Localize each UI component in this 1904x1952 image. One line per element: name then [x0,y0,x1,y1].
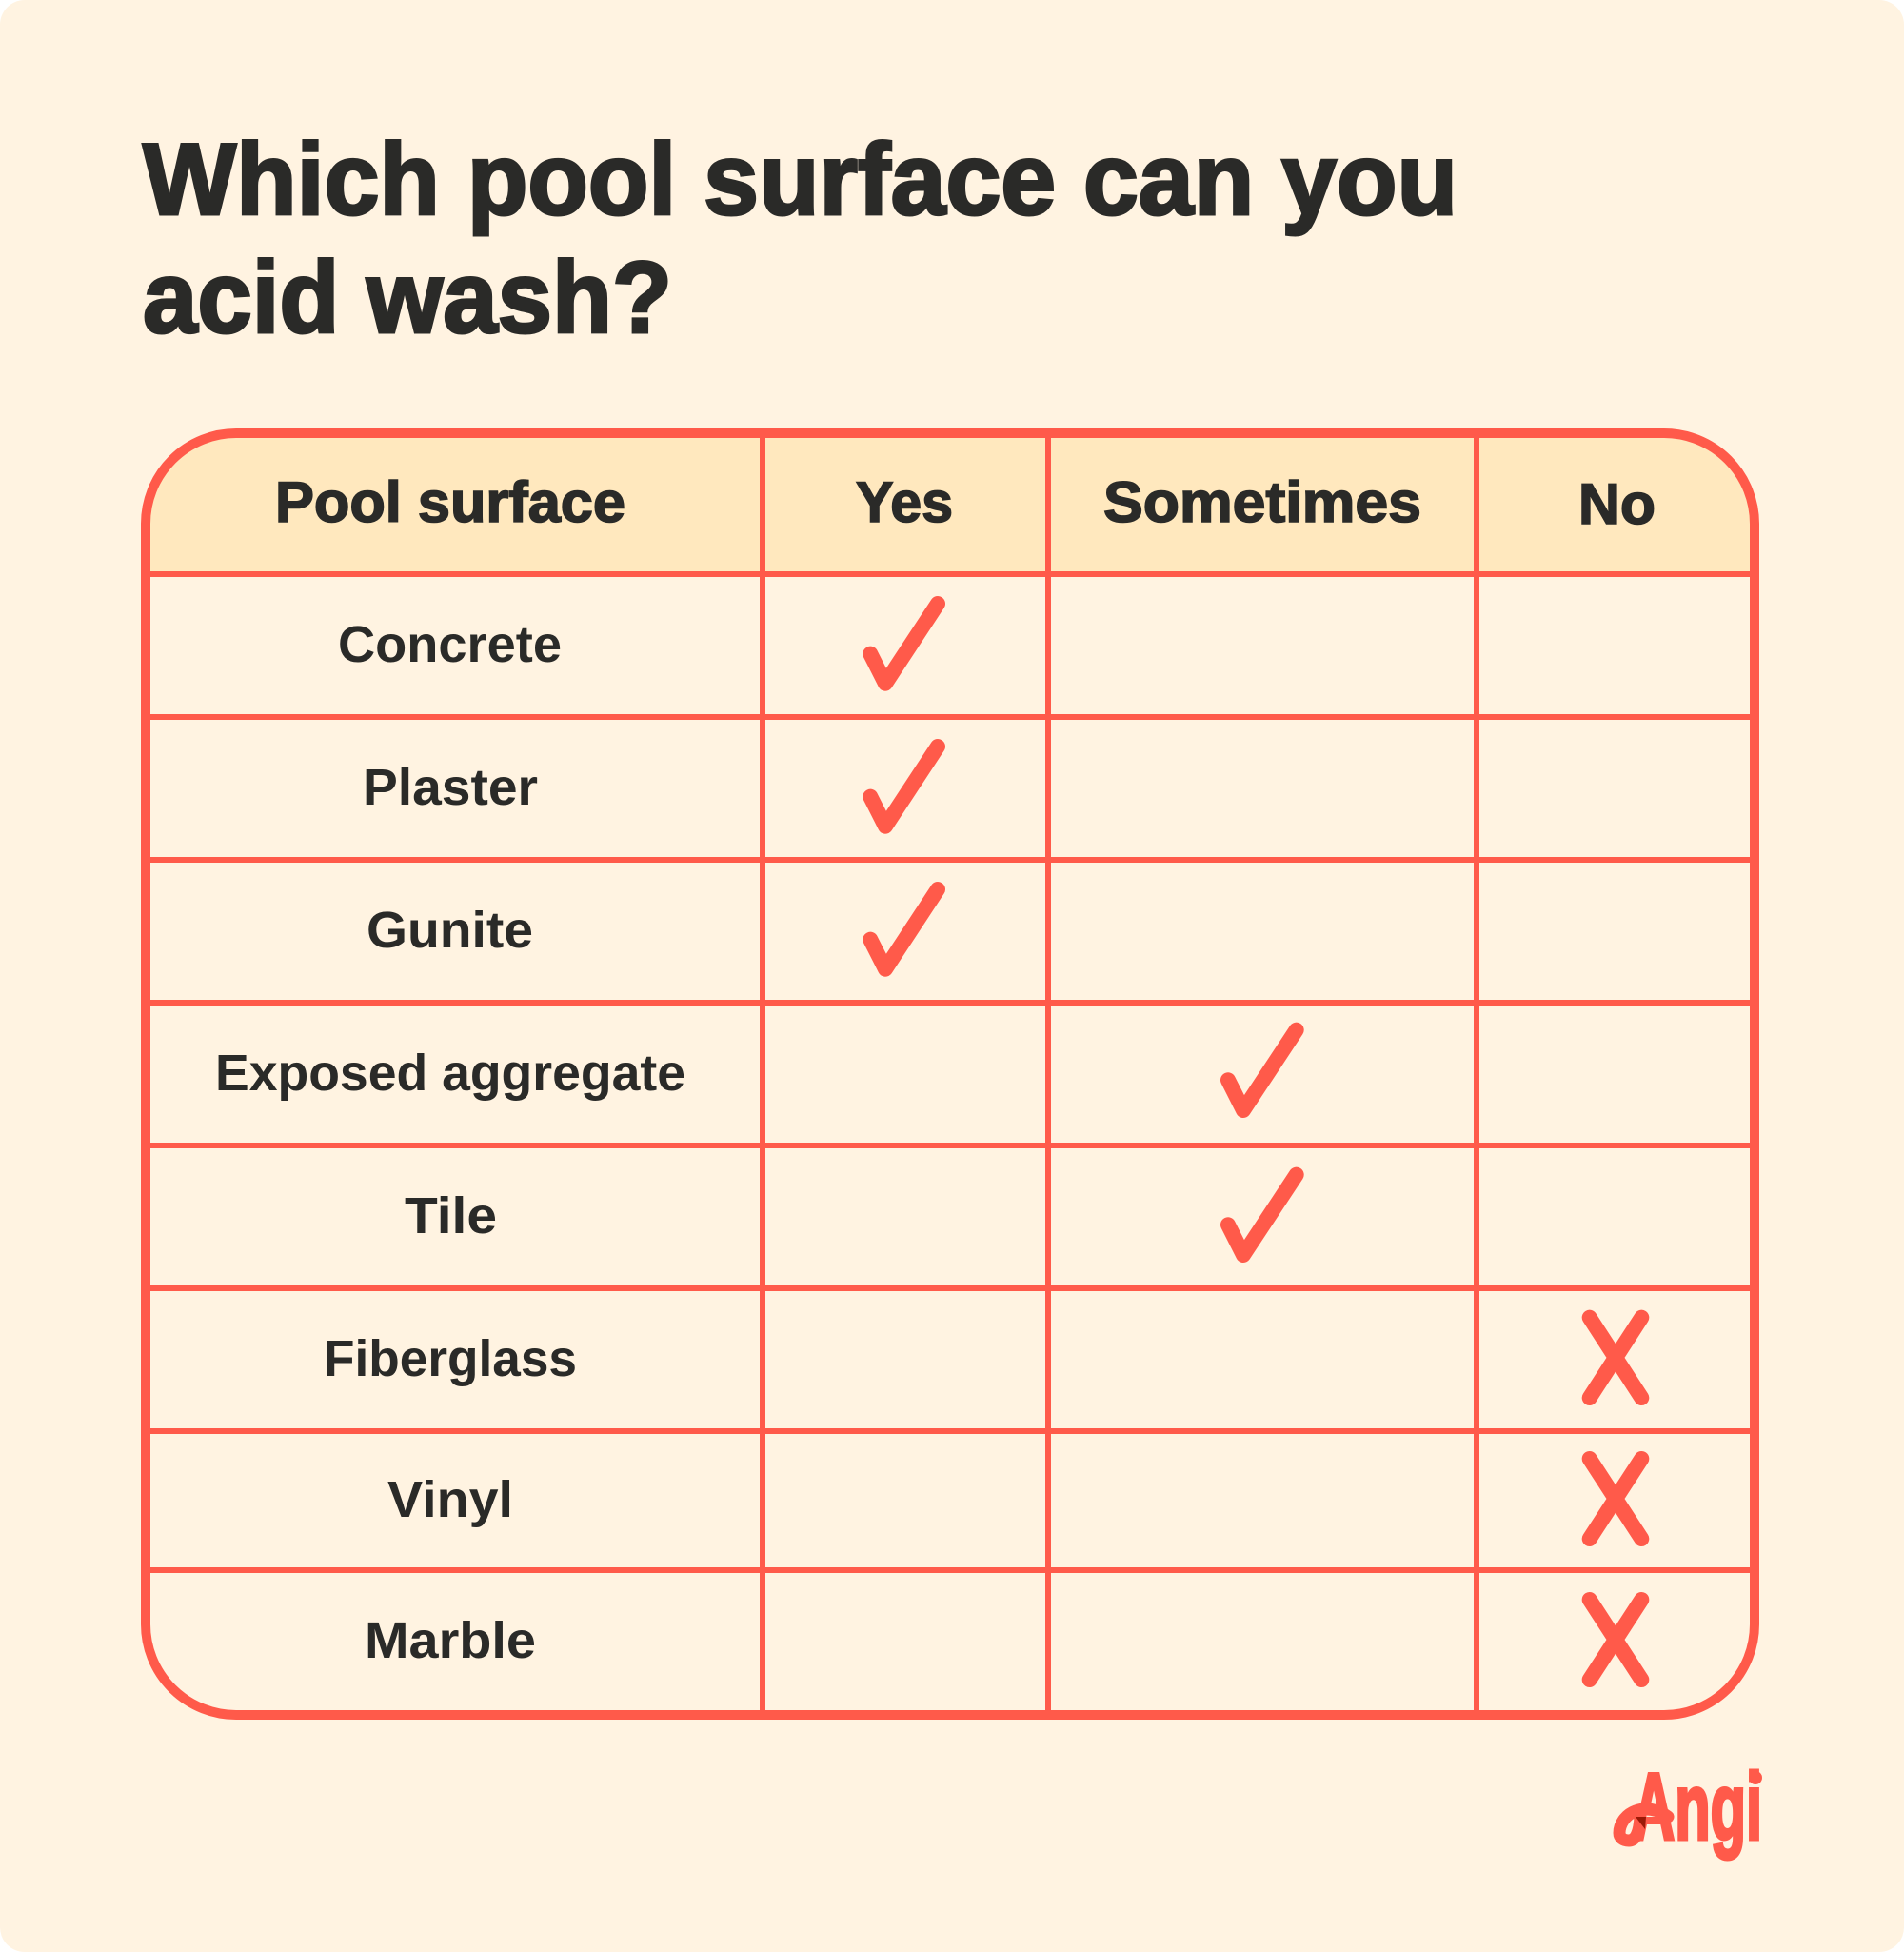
title: acid wash? [143,240,672,354]
row label: Exposed aggregate: Exposed aggregate [215,1045,685,1102]
Angi logo [1619,1754,1762,1859]
row label: Concrete: Concrete [338,616,562,673]
column heading: No: No [1578,472,1656,536]
row label: Plaster: Plaster [363,759,538,816]
icon: cross, Vinyl / No [1590,1459,1641,1539]
table header background [146,433,1755,574]
icon: check, Concrete / Yes [870,604,938,684]
icon: check, Exposed aggregate / Sometimes [1228,1030,1297,1110]
icon: check, Tile / Sometimes [1228,1175,1297,1255]
icon: cross, Marble / No [1590,1600,1641,1680]
column heading: Sometimes: Sometimes [1103,470,1421,534]
column heading: Yes: Yes [856,470,953,534]
Angi logo: Angi [1633,1754,1762,1859]
row label: Fiberglass: Fiberglass [324,1330,577,1387]
table [146,433,1755,1715]
row label: Tile: Tile [405,1187,497,1245]
table grid lines [146,433,1755,1715]
row label: Vinyl: Vinyl [387,1471,513,1528]
column heading: Pool surface: Pool surface [275,470,625,534]
table outer frame [146,433,1755,1715]
title [143,122,1458,354]
row label: Gunite: Gunite [367,902,533,959]
icon: check, Gunite / Yes [870,889,938,969]
icon: cross, Fiberglass / No [1590,1318,1641,1398]
icon: check, Plaster / Yes [870,747,938,827]
row label: Marble: Marble [365,1612,536,1669]
title: Which pool surface can you [143,122,1458,236]
